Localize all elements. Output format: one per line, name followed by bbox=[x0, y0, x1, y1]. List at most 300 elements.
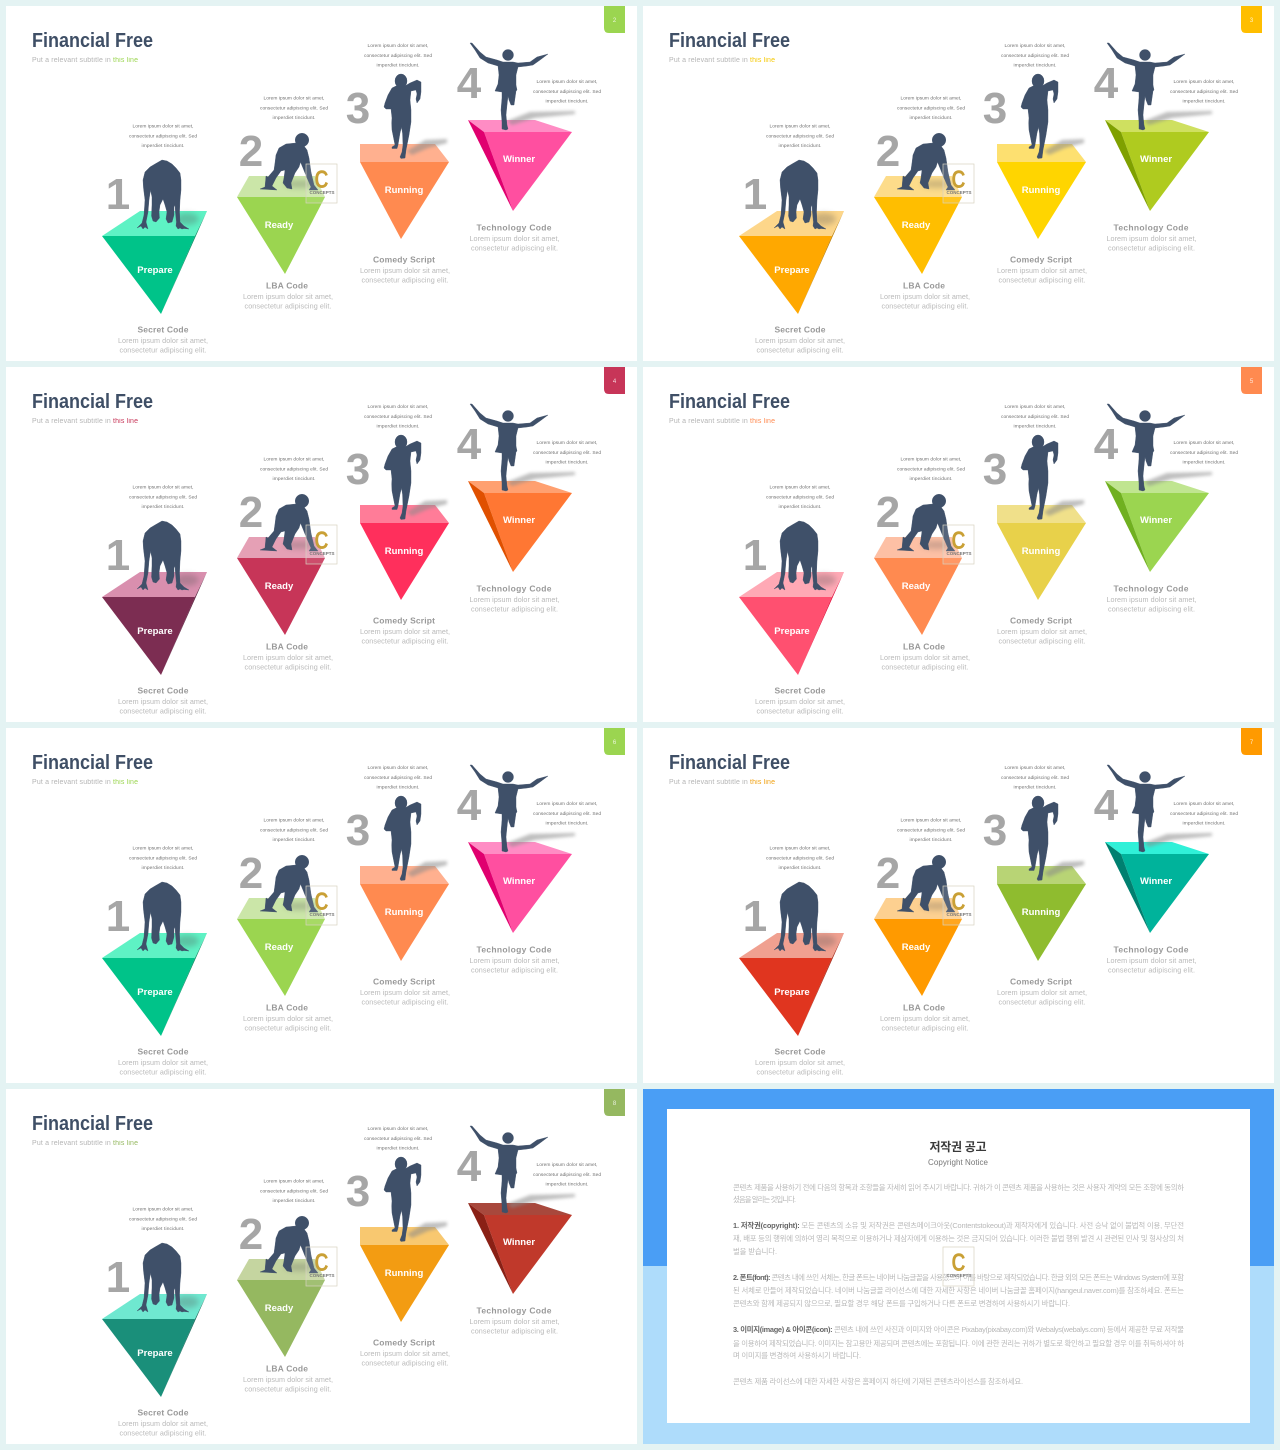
small captions: imperdiet tincidunt. bbox=[1014, 62, 1056, 68]
step numbers: 2 bbox=[239, 488, 263, 537]
panel: slide 3 bbox=[643, 6, 1274, 361]
slide background bbox=[643, 367, 1274, 722]
small captions bbox=[129, 404, 601, 510]
step 4 pyramid: Winner bbox=[503, 515, 535, 526]
panel: slide 5 bbox=[643, 367, 1274, 722]
small captions: Lorem ipsum dolor sit amet, bbox=[770, 846, 830, 852]
descriptions: Lorem ipsum dolor sit amet, bbox=[360, 627, 450, 636]
runner shadows bbox=[407, 472, 575, 516]
step 3 pyramid bbox=[997, 866, 1086, 961]
step numbers: 3 bbox=[346, 806, 370, 855]
descriptions: Comedy Script bbox=[373, 254, 435, 264]
descriptions: LBA Code bbox=[903, 1002, 945, 1012]
step numbers: 1 bbox=[743, 892, 767, 941]
small captions bbox=[129, 43, 601, 149]
silhouettes bbox=[774, 404, 1185, 590]
step 3 pyramid: Running bbox=[1022, 907, 1060, 918]
small captions bbox=[129, 1126, 601, 1232]
slide background bbox=[6, 367, 637, 722]
step 4 pyramid bbox=[1105, 842, 1209, 933]
step numbers: 3 bbox=[346, 1167, 370, 1216]
descriptions: consectetur adipiscing elit. bbox=[120, 1068, 206, 1076]
descriptions: Technology Code bbox=[1114, 584, 1189, 594]
descriptions bbox=[118, 584, 560, 716]
small captions: Lorem ipsum dolor sit amet, bbox=[1004, 404, 1066, 410]
step 2 pyramid: Ready bbox=[265, 1303, 294, 1314]
descriptions: Secret Code bbox=[138, 1408, 189, 1418]
step 1 pyramid bbox=[739, 211, 844, 314]
step 2 pyramid bbox=[874, 537, 962, 635]
descriptions: consectetur adipiscing elit. bbox=[471, 244, 558, 252]
small captions: Lorem ipsum dolor sit amet, bbox=[1174, 79, 1234, 85]
step 2 pyramid bbox=[874, 176, 962, 274]
descriptions: Lorem ipsum dolor sit amet, bbox=[755, 336, 845, 345]
step numbers bbox=[106, 59, 482, 219]
small captions: imperdiet tincidunt. bbox=[376, 784, 420, 790]
step numbers bbox=[743, 781, 1119, 941]
small captions: consectetur adipiscing elit. Sed bbox=[766, 134, 834, 140]
small captions: imperdiet tincidunt. bbox=[272, 837, 316, 843]
small captions: Lorem ipsum dolor sit amet, bbox=[132, 484, 194, 490]
descriptions: Comedy Script bbox=[1010, 616, 1072, 626]
small captions: imperdiet tincidunt. bbox=[272, 1198, 316, 1204]
step numbers bbox=[106, 1142, 482, 1302]
page badge: 3 bbox=[1250, 18, 1254, 24]
step 4 pyramid bbox=[468, 481, 572, 572]
descriptions: LBA Code bbox=[266, 1002, 308, 1012]
descriptions: consectetur adipiscing elit. bbox=[120, 346, 206, 354]
page badge: 4 bbox=[613, 379, 617, 385]
descriptions: LBA Code bbox=[266, 642, 308, 652]
descriptions: consectetur adipiscing elit. bbox=[471, 966, 558, 974]
step 1 pyramid: Prepare bbox=[774, 626, 810, 637]
title: Financial Free bbox=[669, 391, 790, 413]
subtitle: Put a relevant subtitle in this line bbox=[32, 57, 138, 64]
step numbers: 1 bbox=[106, 531, 130, 580]
small captions: Lorem ipsum dolor sit amet, bbox=[368, 765, 428, 771]
descriptions: LBA Code bbox=[903, 642, 945, 652]
silhouettes bbox=[137, 404, 548, 590]
step numbers: 4 bbox=[457, 1142, 482, 1191]
small captions: consectetur adipiscing elit. Sed bbox=[533, 1172, 601, 1178]
silhouettes bbox=[137, 765, 548, 951]
small captions: imperdiet tincidunt. bbox=[1182, 820, 1226, 826]
step numbers: 4 bbox=[457, 420, 482, 469]
descriptions: consectetur adipiscing elit. bbox=[471, 1326, 558, 1336]
watermark bbox=[306, 886, 337, 925]
descriptions: Lorem ipsum dolor sit amet, bbox=[470, 956, 560, 965]
descriptions: Technology Code bbox=[476, 584, 552, 594]
step 1 pyramid: Prepare bbox=[137, 987, 173, 998]
small captions: Lorem ipsum dolor sit amet, bbox=[368, 43, 428, 49]
descriptions: Comedy Script bbox=[373, 1338, 435, 1348]
step 1 pyramid: Prepare bbox=[137, 1348, 173, 1359]
step numbers: 3 bbox=[346, 84, 370, 133]
step 4 pyramid bbox=[468, 842, 572, 933]
runner shadows bbox=[1044, 472, 1212, 516]
small captions: Lorem ipsum dolor sit amet, bbox=[368, 1126, 428, 1132]
small captions: Lorem ipsum dolor sit amet, bbox=[132, 846, 194, 852]
small captions bbox=[766, 43, 1238, 149]
descriptions: Lorem ipsum dolor sit amet, bbox=[470, 1317, 560, 1326]
descriptions: Secret Code bbox=[774, 686, 826, 696]
small captions: Lorem ipsum dolor sit amet, bbox=[536, 1162, 598, 1168]
step 4 pyramid bbox=[468, 120, 572, 211]
descriptions: Lorem ipsum dolor sit amet, bbox=[1106, 595, 1196, 604]
small captions: Lorem ipsum dolor sit amet, bbox=[1174, 801, 1234, 807]
small captions: Lorem ipsum dolor sit amet, bbox=[264, 1178, 324, 1184]
watermark bbox=[306, 525, 337, 564]
small captions: imperdiet tincidunt. bbox=[272, 115, 316, 121]
panel: slide 7 bbox=[643, 728, 1274, 1083]
small captions: consectetur adipiscing elit. Sed bbox=[766, 494, 834, 500]
step 1 pyramid: Prepare bbox=[774, 987, 810, 998]
descriptions: Lorem ipsum dolor sit amet, bbox=[118, 1419, 208, 1428]
step 1 pyramid bbox=[102, 211, 207, 314]
small captions: Lorem ipsum dolor sit amet, bbox=[900, 96, 962, 102]
descriptions bbox=[118, 222, 560, 354]
descriptions bbox=[755, 222, 1196, 354]
descriptions: Comedy Script bbox=[373, 976, 435, 986]
step 3 pyramid bbox=[360, 505, 449, 600]
small captions: imperdiet tincidunt. bbox=[376, 62, 420, 68]
step numbers: 4 bbox=[457, 781, 482, 830]
subtitle: Put a relevant subtitle in this line bbox=[669, 418, 775, 425]
descriptions: consectetur adipiscing elit. bbox=[244, 1024, 332, 1032]
page badge: 6 bbox=[613, 740, 617, 746]
small captions: Lorem ipsum dolor sit amet, bbox=[536, 440, 598, 446]
descriptions: Lorem ipsum dolor sit amet, bbox=[360, 266, 450, 275]
page badge: 5 bbox=[1250, 379, 1254, 385]
watermark bbox=[943, 525, 974, 564]
small captions: imperdiet tincidunt. bbox=[910, 837, 952, 843]
step 3 pyramid bbox=[360, 144, 449, 239]
small captions: consectetur adipiscing elit. Sed bbox=[897, 106, 965, 112]
step 2 pyramid bbox=[874, 898, 962, 996]
notice body: 콘텐츠 제품을 사용하기 전에 다음의 항목과 조항들을 자세히 읽어 주시기 바랍니다. 귀하가 이 콘텐츠 제품을 사용하는 것은 사용자 계약의 모든 조항에 동의하 bbox=[733, 1183, 1184, 1192]
small captions: consectetur adipiscing elit. Sed bbox=[364, 414, 432, 420]
slide background bbox=[643, 728, 1274, 1083]
descriptions: Comedy Script bbox=[1010, 254, 1072, 264]
small captions: consectetur adipiscing elit. Sed bbox=[897, 828, 965, 834]
descriptions: consectetur adipiscing elit. bbox=[882, 302, 968, 310]
small captions: imperdiet tincidunt. bbox=[142, 865, 184, 871]
small captions: imperdiet tincidunt. bbox=[546, 820, 588, 826]
slide background bbox=[6, 1089, 637, 1444]
descriptions: Lorem ipsum dolor sit amet, bbox=[997, 627, 1087, 636]
title: Financial Free bbox=[669, 30, 790, 52]
step 2 pyramid bbox=[237, 898, 325, 996]
small captions: Lorem ipsum dolor sit amet, bbox=[536, 79, 598, 85]
step 4 pyramid bbox=[1105, 481, 1209, 572]
descriptions: Lorem ipsum dolor sit amet, bbox=[1106, 234, 1196, 243]
panel: slide 4 bbox=[6, 367, 637, 722]
notice body: 벌을 받습니다. bbox=[733, 1247, 777, 1256]
descriptions: consectetur adipiscing elit. bbox=[244, 1384, 332, 1394]
step 2 pyramid: Ready bbox=[902, 220, 931, 231]
step 4 pyramid: Winner bbox=[1140, 154, 1172, 165]
page badge bbox=[604, 367, 625, 394]
silhouettes bbox=[137, 43, 548, 229]
descriptions: consectetur adipiscing elit. bbox=[882, 662, 968, 672]
step numbers: 2 bbox=[876, 127, 900, 176]
small captions: Lorem ipsum dolor sit amet, bbox=[264, 96, 324, 102]
step numbers: 3 bbox=[983, 806, 1007, 855]
descriptions: Technology Code bbox=[1114, 222, 1189, 232]
small captions: consectetur adipiscing elit. Sed bbox=[260, 466, 328, 472]
small captions: imperdiet tincidunt. bbox=[142, 143, 184, 149]
small captions: consectetur adipiscing elit. Sed bbox=[129, 1216, 197, 1222]
page badge bbox=[1241, 6, 1262, 33]
small captions bbox=[129, 765, 601, 871]
descriptions: consectetur adipiscing elit. bbox=[120, 706, 206, 716]
step 2 pyramid bbox=[237, 1259, 325, 1357]
small captions: imperdiet tincidunt. bbox=[272, 476, 316, 482]
descriptions: consectetur adipiscing elit. bbox=[244, 302, 332, 310]
small captions: Lorem ipsum dolor sit amet, bbox=[900, 456, 962, 462]
descriptions: Comedy Script bbox=[1010, 976, 1072, 986]
small captions: imperdiet tincidunt. bbox=[910, 476, 952, 482]
page badge bbox=[604, 728, 625, 755]
step 3 pyramid bbox=[360, 866, 449, 961]
small captions: consectetur adipiscing elit. Sed bbox=[1001, 414, 1069, 420]
descriptions: Lorem ipsum dolor sit amet, bbox=[118, 336, 208, 345]
step numbers: 1 bbox=[743, 170, 767, 219]
small captions: consectetur adipiscing elit. Sed bbox=[1001, 53, 1069, 59]
step numbers: 3 bbox=[346, 445, 370, 494]
small captions: consectetur adipiscing elit. Sed bbox=[260, 1188, 328, 1194]
page badge: 2 bbox=[613, 18, 617, 24]
step 1 pyramid: Prepare bbox=[774, 265, 810, 276]
descriptions: Lorem ipsum dolor sit amet, bbox=[243, 292, 333, 301]
descriptions: Lorem ipsum dolor sit amet, bbox=[118, 697, 208, 706]
descriptions bbox=[755, 944, 1196, 1076]
descriptions: consectetur adipiscing elit. bbox=[756, 346, 844, 354]
descriptions: Secret Code bbox=[138, 686, 189, 696]
descriptions: Lorem ipsum dolor sit amet, bbox=[360, 1349, 450, 1358]
small captions: consectetur adipiscing elit. Sed bbox=[364, 775, 432, 781]
panel: slide 2 bbox=[6, 6, 637, 361]
step 1 pyramid: Prepare bbox=[137, 626, 173, 637]
descriptions: Lorem ipsum dolor sit amet, bbox=[997, 266, 1087, 275]
title: Financial Free bbox=[32, 30, 153, 52]
small captions: imperdiet tincidunt. bbox=[376, 424, 420, 430]
step 1 pyramid bbox=[102, 1294, 207, 1397]
small captions: Lorem ipsum dolor sit amet, bbox=[368, 404, 428, 410]
small captions: imperdiet tincidunt. bbox=[142, 504, 184, 510]
descriptions: consectetur adipiscing elit. bbox=[882, 1024, 968, 1032]
notice body: 콘텐츠와 함께 제공되지 않으므로, 필요할 경우 해당 폰트를 구입하거나 다른 폰트로 변경하여 사용하시기 바랍니다. bbox=[733, 1299, 1070, 1308]
runner shadows bbox=[407, 111, 575, 155]
small captions: consectetur adipiscing elit. Sed bbox=[129, 134, 197, 140]
descriptions: Technology Code bbox=[1114, 944, 1189, 954]
small captions: consectetur adipiscing elit. Sed bbox=[260, 106, 328, 112]
white notice card bbox=[667, 1109, 1250, 1423]
notice body: 을 이용하여 제작되었습니다. 이미지는 참고용만 제공되며 콘텐츠에는 포함됩니다. 이에 관한 권리는 귀하가 별도로 확인하고 필요할 경우 이를 취득하셔야 하 bbox=[733, 1339, 1184, 1348]
small captions: imperdiet tincidunt. bbox=[142, 1226, 184, 1232]
small captions: consectetur adipiscing elit. Sed bbox=[364, 53, 432, 59]
descriptions: consectetur adipiscing elit. bbox=[1108, 966, 1195, 974]
notice title: 저작권 공고 bbox=[930, 1139, 986, 1154]
watermark bbox=[943, 164, 974, 203]
descriptions: Lorem ipsum dolor sit amet, bbox=[755, 697, 845, 706]
step 1 pyramid: Prepare bbox=[137, 265, 173, 276]
notice body: 콘텐츠 제품 라이선스에 대한 자세한 사항은 홈페이지 하단에 기재된 콘텐츠라이선스를 참조하세요. bbox=[733, 1377, 1023, 1386]
step numbers: 3 bbox=[983, 445, 1007, 494]
step numbers: 4 bbox=[1094, 781, 1119, 830]
descriptions bbox=[118, 1306, 560, 1438]
page badge bbox=[604, 6, 625, 33]
descriptions: consectetur adipiscing elit. bbox=[1108, 604, 1195, 614]
slide background bbox=[6, 728, 637, 1083]
descriptions: Lorem ipsum dolor sit amet, bbox=[755, 1058, 845, 1067]
page badge bbox=[1241, 728, 1262, 755]
step 1 pyramid bbox=[739, 933, 844, 1036]
step numbers: 1 bbox=[106, 170, 130, 219]
notice body: 2. 폰트(font): 콘텐츠 내에 쓰인 서체는, 한글 폰트는 네이버 나눔글꼴을 사용했으며 이를 바탕으로 제작되었습니다. 한글 외의 모든 폰트는 Windows System에 포함 bbox=[733, 1273, 1184, 1282]
descriptions: LBA Code bbox=[266, 1364, 308, 1374]
small captions: consectetur adipiscing elit. Sed bbox=[1170, 811, 1238, 817]
step numbers: 2 bbox=[239, 849, 263, 898]
notice body: 3. 이미지(image) & 아이콘(icon): 콘텐츠 내에 쓰인 사진과 이미지와 아이콘은 Pixabay(pixabay.com)와 Webalys(webalys.com) 등에서 제공한 무료 저작물 bbox=[733, 1325, 1184, 1334]
step 4 pyramid bbox=[468, 1203, 572, 1294]
step 3 pyramid: Running bbox=[385, 185, 423, 196]
step 3 pyramid: Running bbox=[385, 546, 423, 557]
subtitle: Put a relevant subtitle in this line bbox=[669, 779, 775, 786]
step numbers: 1 bbox=[106, 892, 130, 941]
step 2 pyramid: Ready bbox=[902, 581, 931, 592]
descriptions: Lorem ipsum dolor sit amet, bbox=[997, 988, 1087, 997]
step 2 pyramid: Ready bbox=[265, 581, 294, 592]
slide background bbox=[6, 6, 637, 361]
small captions: Lorem ipsum dolor sit amet, bbox=[132, 1206, 194, 1212]
notice body: 셨음을 알리는 것입니다. bbox=[733, 1195, 796, 1204]
descriptions: consectetur adipiscing elit. bbox=[362, 636, 448, 646]
descriptions: Comedy Script bbox=[373, 616, 435, 626]
descriptions: consectetur adipiscing elit. bbox=[362, 1358, 448, 1368]
step numbers bbox=[106, 781, 482, 941]
small captions: imperdiet tincidunt. bbox=[778, 504, 822, 510]
descriptions: Technology Code bbox=[476, 222, 552, 232]
small captions bbox=[766, 404, 1238, 510]
descriptions: Secret Code bbox=[774, 1046, 826, 1056]
step 1 pyramid bbox=[102, 572, 207, 675]
descriptions: consectetur adipiscing elit. bbox=[362, 276, 448, 284]
descriptions: Technology Code bbox=[476, 1306, 552, 1316]
small captions: Lorem ipsum dolor sit amet, bbox=[264, 818, 324, 824]
runner shadows bbox=[407, 1194, 575, 1238]
small captions: imperdiet tincidunt. bbox=[546, 460, 588, 466]
step numbers bbox=[743, 420, 1119, 580]
runner shadows bbox=[1044, 833, 1212, 877]
small captions: Lorem ipsum dolor sit amet, bbox=[1004, 765, 1066, 771]
small captions: consectetur adipiscing elit. Sed bbox=[129, 494, 197, 500]
descriptions: Technology Code bbox=[476, 944, 552, 954]
small captions: Lorem ipsum dolor sit amet, bbox=[770, 484, 830, 490]
step numbers: 2 bbox=[876, 849, 900, 898]
small captions bbox=[766, 765, 1238, 871]
watermark bbox=[306, 1247, 337, 1286]
small captions: imperdiet tincidunt. bbox=[1014, 784, 1056, 790]
subtitle: Put a relevant subtitle in this line bbox=[669, 57, 775, 64]
descriptions: consectetur adipiscing elit. bbox=[471, 604, 558, 614]
step numbers bbox=[106, 420, 482, 580]
step 1 pyramid bbox=[739, 572, 844, 675]
descriptions: LBA Code bbox=[266, 280, 308, 290]
descriptions bbox=[118, 944, 560, 1076]
panel: slide 8 bbox=[6, 1089, 637, 1444]
step 2 pyramid: Ready bbox=[902, 942, 931, 953]
step numbers: 2 bbox=[876, 488, 900, 537]
runner shadows bbox=[1044, 111, 1212, 155]
small captions: Lorem ipsum dolor sit amet, bbox=[900, 818, 962, 824]
small captions: consectetur adipiscing elit. Sed bbox=[533, 89, 601, 95]
panel: copyright notice bbox=[643, 1089, 1274, 1444]
small captions: consectetur adipiscing elit. Sed bbox=[897, 466, 965, 472]
notice body bbox=[733, 1183, 1184, 1386]
small captions: consectetur adipiscing elit. Sed bbox=[260, 828, 328, 834]
descriptions: Lorem ipsum dolor sit amet, bbox=[118, 1058, 208, 1067]
silhouettes bbox=[774, 765, 1185, 951]
step 2 pyramid bbox=[237, 537, 325, 635]
descriptions: consectetur adipiscing elit. bbox=[756, 706, 844, 716]
descriptions bbox=[755, 584, 1196, 716]
step numbers: 1 bbox=[106, 1253, 130, 1302]
step 4 pyramid: Winner bbox=[503, 876, 535, 887]
small captions: imperdiet tincidunt. bbox=[910, 115, 952, 121]
small captions: consectetur adipiscing elit. Sed bbox=[129, 856, 197, 862]
small captions: Lorem ipsum dolor sit amet, bbox=[1004, 43, 1066, 49]
small captions: imperdiet tincidunt. bbox=[546, 1182, 588, 1188]
watermark bbox=[943, 886, 974, 925]
small captions: consectetur adipiscing elit. Sed bbox=[1170, 89, 1238, 95]
step numbers: 2 bbox=[239, 127, 263, 176]
title: Financial Free bbox=[32, 1113, 153, 1135]
subtitle: Put a relevant subtitle in this line bbox=[32, 1140, 138, 1147]
step numbers: 1 bbox=[743, 531, 767, 580]
descriptions: consectetur adipiscing elit. bbox=[120, 1428, 206, 1438]
step numbers: 4 bbox=[457, 59, 482, 108]
descriptions: consectetur adipiscing elit. bbox=[756, 1068, 844, 1076]
step 2 pyramid: Ready bbox=[265, 942, 294, 953]
slide background bbox=[643, 6, 1274, 361]
descriptions: Lorem ipsum dolor sit amet, bbox=[880, 653, 970, 662]
descriptions: Lorem ipsum dolor sit amet, bbox=[360, 988, 450, 997]
descriptions: Secret Code bbox=[138, 324, 189, 334]
descriptions: consectetur adipiscing elit. bbox=[998, 276, 1086, 284]
small captions: Lorem ipsum dolor sit amet, bbox=[264, 456, 324, 462]
small captions: consectetur adipiscing elit. Sed bbox=[533, 450, 601, 456]
descriptions: consectetur adipiscing elit. bbox=[244, 662, 332, 672]
step numbers: 4 bbox=[1094, 420, 1119, 469]
step 1 pyramid bbox=[102, 933, 207, 1036]
small captions: imperdiet tincidunt. bbox=[1182, 460, 1226, 466]
step 3 pyramid bbox=[360, 1227, 449, 1322]
notice body: 재, 배포 등의 행위에 의하여 영리 목적으로 이용하거나 제삼자에게 이용하는 것은 금지되어 있습니다. 이러한 불법 행위 발견 시 관련된 민사 및 형사상의 처 bbox=[733, 1234, 1184, 1243]
step 2 pyramid: Ready bbox=[265, 220, 294, 231]
step 4 pyramid: Winner bbox=[1140, 515, 1172, 526]
descriptions: LBA Code bbox=[903, 280, 945, 290]
page badge: 7 bbox=[1250, 740, 1254, 746]
descriptions: Lorem ipsum dolor sit amet, bbox=[880, 1014, 970, 1023]
small captions: Lorem ipsum dolor sit amet, bbox=[1174, 440, 1234, 446]
descriptions: Lorem ipsum dolor sit amet, bbox=[1106, 956, 1196, 965]
descriptions: Secret Code bbox=[138, 1046, 189, 1056]
notice body: 며 이미지를 변경하여 사용하시기 바랍니다. bbox=[733, 1351, 861, 1360]
small captions: consectetur adipiscing elit. Sed bbox=[766, 856, 834, 862]
page badge bbox=[604, 1089, 625, 1116]
small captions: Lorem ipsum dolor sit amet, bbox=[132, 124, 194, 130]
